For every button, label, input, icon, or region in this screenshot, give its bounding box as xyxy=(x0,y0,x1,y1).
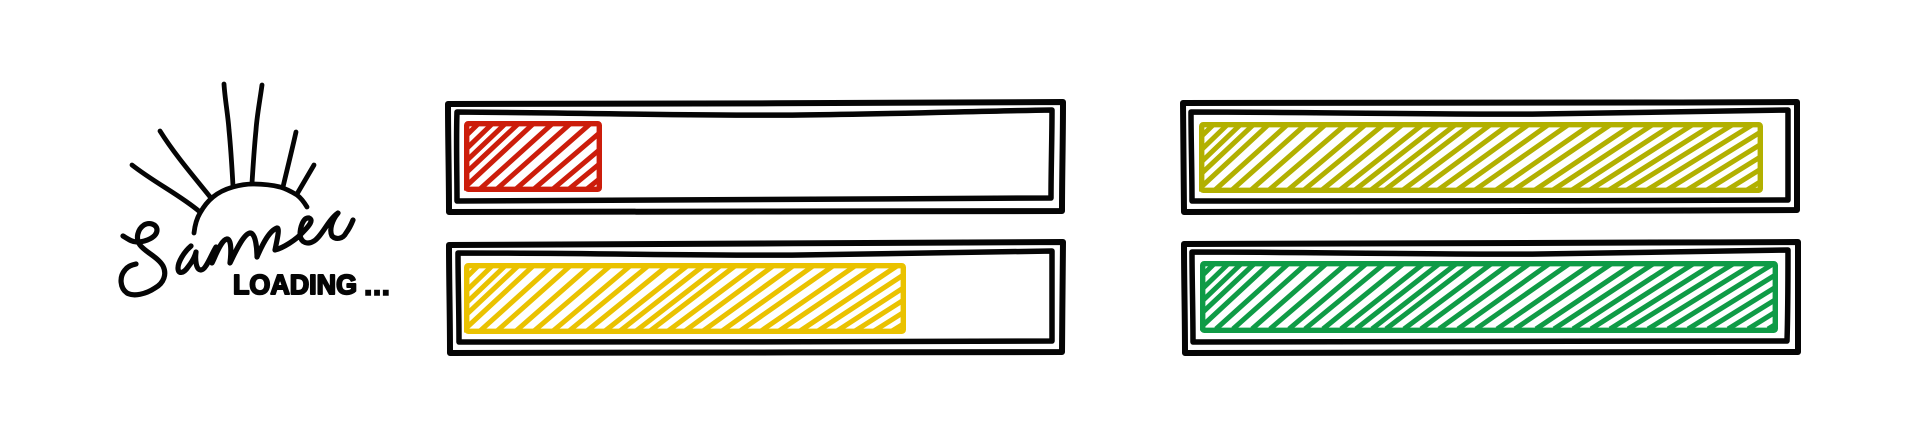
olive hatched fill xyxy=(1199,122,1763,193)
icon: sun with rays xyxy=(132,84,314,233)
progress bar: olive, high xyxy=(1147,102,1872,212)
progress bar: red, low xyxy=(412,102,1137,212)
script word: Summer xyxy=(121,213,353,295)
text: loading: ... xyxy=(364,269,390,302)
progress bar: yellow, medium xyxy=(412,242,1137,353)
progress bar: green, full xyxy=(1148,242,1873,353)
bar frame xyxy=(1184,242,1798,353)
bar frame xyxy=(448,102,1063,212)
text: loading: LOADING xyxy=(233,269,357,300)
yellow hatched fill xyxy=(464,263,906,334)
green hatched fill xyxy=(1200,261,1778,333)
red hatched fill xyxy=(464,121,602,192)
bar frame xyxy=(1183,102,1797,212)
sun and summer loading logo xyxy=(121,84,390,302)
bar frame xyxy=(449,242,1063,353)
